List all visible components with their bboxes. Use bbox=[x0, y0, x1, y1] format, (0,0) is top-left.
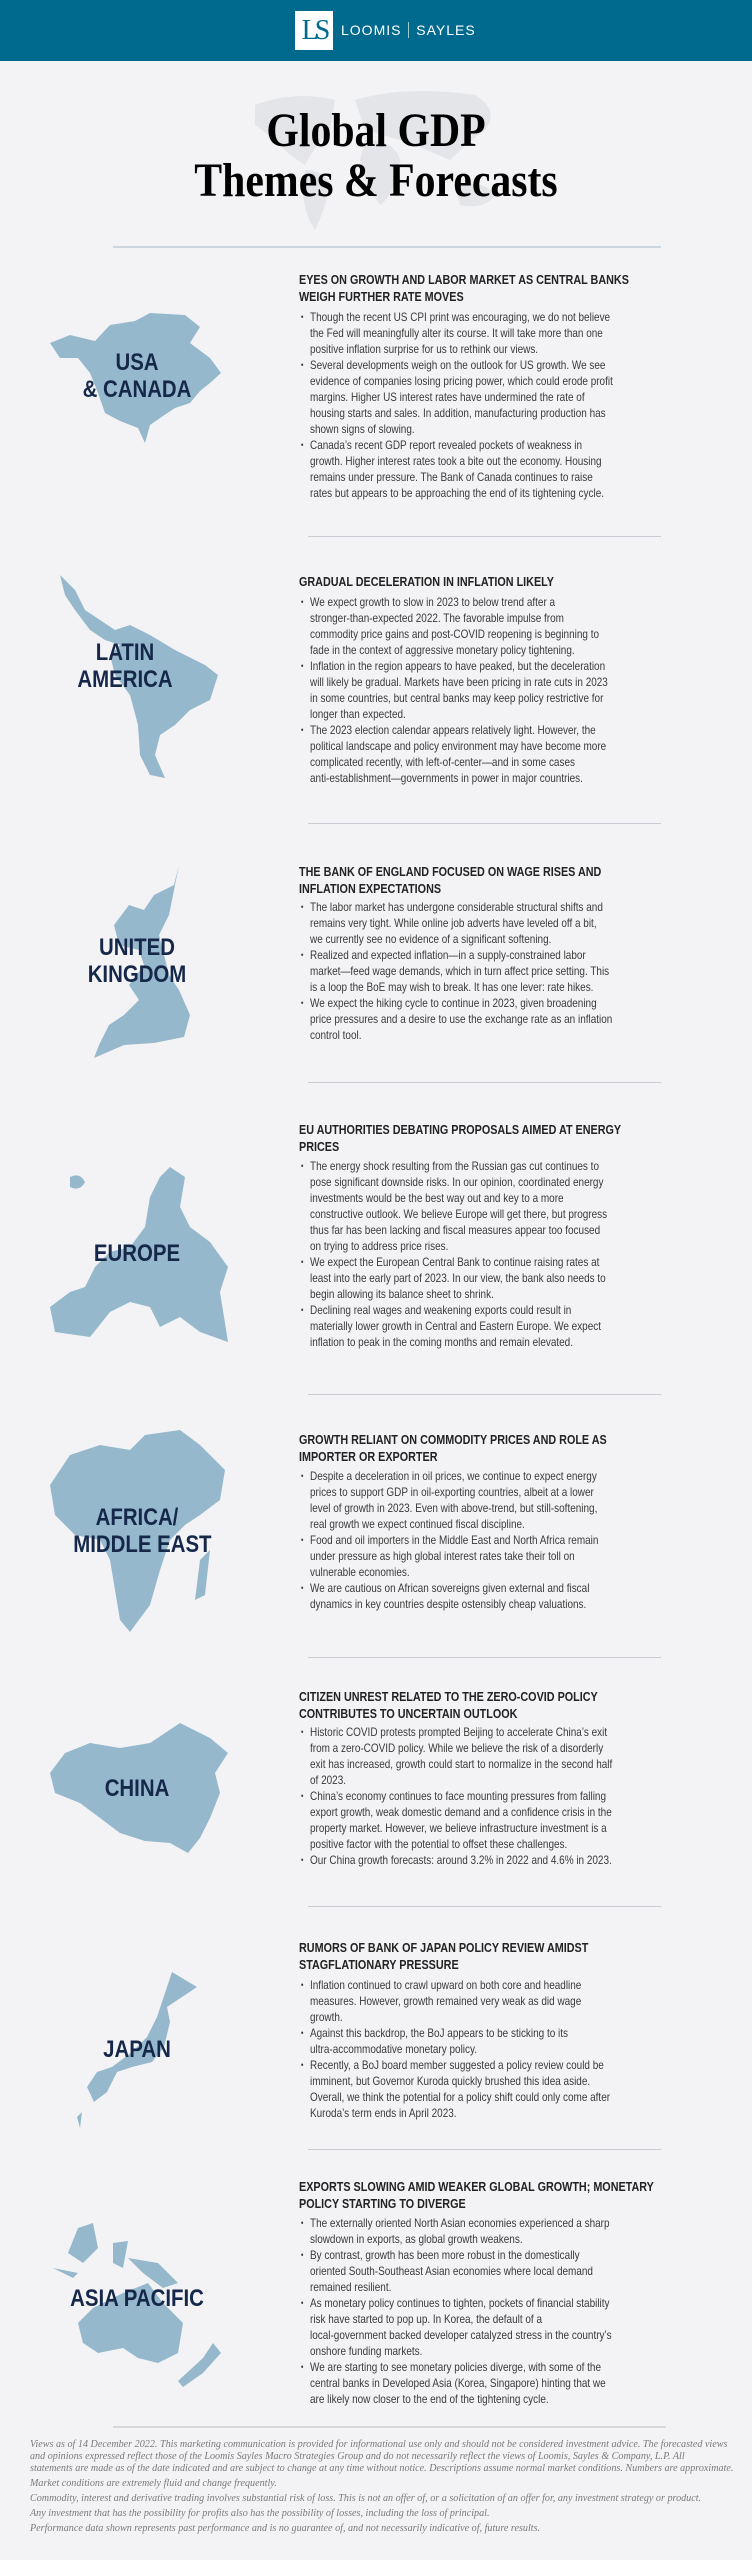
bullets: rates but appears to be approaching the end of its tightening cycle. bbox=[310, 486, 604, 500]
bullets: Overall, we think the potential for a policy shift could only come after bbox=[310, 2090, 610, 2104]
heading bbox=[299, 864, 601, 896]
heading bbox=[299, 1122, 621, 1154]
bullets: stronger-than-expected 2022. The favorable impulse from bbox=[310, 611, 564, 625]
bullets bbox=[301, 1978, 610, 2120]
bullets: growth. bbox=[310, 2010, 343, 2024]
bullets: materially lower growth in Central and Eastern Europe. We expect bbox=[310, 1319, 601, 1333]
heading: GROWTH RELIANT ON COMMODITY PRICES AND ROLE AS bbox=[299, 1432, 607, 1447]
heading: CONTRIBUTES TO UNCERTAIN OUTLOOK bbox=[299, 1706, 517, 1721]
bullets: dynamics in key countries despite ostensibly cheap valuations. bbox=[310, 1597, 586, 1611]
bullets: of 2023. bbox=[310, 1773, 346, 1787]
bullets: price pressures and a desire to use the exchange rate as an inflation bbox=[310, 1012, 612, 1026]
heading bbox=[299, 272, 629, 304]
panel: usa & canada bbox=[50, 272, 629, 500]
footer disclaimer: Views as of 14 December 2022. This marketing communication is provided for informational use only and should not be considered investment advice. The forecasted views bbox=[30, 2438, 727, 2450]
bullets: Historic COVID protests prompted Beijing to accelerate China’s exit bbox=[310, 1725, 607, 1739]
bullets: central banks in Developed Asia (Korea, Singapore) hinting that we bbox=[310, 2376, 606, 2390]
label: ASIA PACIFIC bbox=[70, 2285, 204, 2312]
heading: STAGFLATIONARY PRESSURE bbox=[299, 1957, 459, 1972]
bullets: property market. However, we believe infrastructure investment is a bbox=[310, 1821, 607, 1835]
bullets: thus far has been lacking and fiscal measures appear too focused bbox=[310, 1223, 600, 1237]
top divider bbox=[113, 246, 661, 248]
label: KINGDOM bbox=[88, 961, 186, 988]
bullets: Our China growth forecasts: around 3.2% in 2022 and 4.6% in 2023. bbox=[310, 1853, 612, 1867]
bullets bbox=[301, 1469, 598, 1611]
footer disclaimer: statements are made as of the date indicated and are subject to change at any time without notice. Descriptions assume normal market conditions. Numbers are approximate. bbox=[30, 2462, 733, 2474]
logo mark: LS bbox=[302, 15, 326, 46]
bullets: under pressure as high global interest rates take their toll on bbox=[310, 1549, 575, 1563]
heading: RUMORS OF BANK OF JAPAN POLICY REVIEW AMIDST bbox=[299, 1940, 588, 1955]
bullets: local-government backed developer catalyzed stress in the country’s bbox=[310, 2328, 612, 2342]
bullets: housing starts and sales. In addition, manufacturing production has bbox=[310, 406, 606, 420]
title world map background bbox=[255, 91, 494, 230]
bullets: margins. Higher US interest rates have undermined the rate of bbox=[310, 390, 585, 404]
heading: GRADUAL DECELERATION IN INFLATION LIKELY bbox=[299, 574, 554, 589]
label: AMERICA bbox=[77, 666, 173, 693]
bullets: Recently, a BoJ board member suggested a policy review could be bbox=[310, 2058, 604, 2072]
bullets: Against this backdrop, the BoJ appears to be sticking to its bbox=[310, 2026, 568, 2040]
map: europe bbox=[50, 1167, 228, 1342]
bullets: the Fed will meaningfully alter its course. It will take more than one bbox=[310, 326, 603, 340]
label bbox=[77, 639, 173, 693]
bullets: Realized and expected inflation—in a supply-constrained labor bbox=[310, 948, 586, 962]
bullets: We are starting to see monetary policies diverge, with some of the bbox=[310, 2360, 601, 2374]
heading: WEIGH FURTHER RATE MOVES bbox=[299, 289, 464, 304]
bullets: positive inflation surprise for us to rethink our views. bbox=[310, 342, 538, 356]
bullets: complicated recently, with left-of-center—and in some cases bbox=[310, 755, 575, 769]
bullets: inflation to peak in the coming months and remain elevated. bbox=[310, 1335, 573, 1349]
bullets: China’s economy continues to face mounting pressures from falling bbox=[310, 1789, 606, 1803]
heading: CITIZEN UNREST RELATED TO THE ZERO-COVID POLICY bbox=[299, 1689, 598, 1704]
bullets: anti-establishment—governments in power in major countries. bbox=[310, 771, 583, 785]
heading: POLICY STARTING TO DIVERGE bbox=[299, 2196, 466, 2211]
heading bbox=[299, 2179, 654, 2211]
heading bbox=[299, 1689, 598, 1721]
title bbox=[194, 104, 558, 207]
bullets: Food and oil importers in the Middle East and North Africa remain bbox=[310, 1533, 598, 1547]
heading bbox=[299, 1940, 588, 1972]
panel: japan bbox=[77, 1940, 610, 2128]
label bbox=[73, 1504, 212, 1558]
bullets: imminent, but Governor Kuroda quickly brushed this idea aside. bbox=[310, 2074, 590, 2088]
bullets: exit has increased, growth could start to normalize in the second half bbox=[310, 1757, 612, 1771]
heading: EXPORTS SLOWING AMID WEAKER GLOBAL GROWTH; MONETARY bbox=[299, 2179, 654, 2194]
map: japan bbox=[77, 1972, 197, 2128]
bullets: from a zero-COVID policy. While we believe the risk of a disorderly bbox=[310, 1741, 603, 1755]
map: china bbox=[50, 1723, 228, 1853]
label: LATIN bbox=[96, 639, 154, 666]
heading: EYES ON GROWTH AND LABOR MARKET AS CENTRAL BANKS bbox=[299, 272, 629, 287]
bullets: prices to support GDP in oil-exporting countries, albeit at a lower bbox=[310, 1485, 594, 1499]
bullets: ultra-accommodative monetary policy. bbox=[310, 2042, 477, 2056]
label bbox=[88, 934, 186, 988]
bullets bbox=[301, 2216, 612, 2406]
map: africa bbox=[50, 1430, 225, 1632]
bullets: control tool. bbox=[310, 1028, 361, 1042]
bullets: Declining real wages and weakening exports could result in bbox=[310, 1303, 571, 1317]
bullets: Canada’s recent GDP report revealed pockets of weakness in bbox=[310, 438, 582, 452]
bullets: We expect the hiking cycle to continue in 2023, given broadening bbox=[310, 996, 597, 1010]
bullets: remains very tight. While online job adverts have leveled off a bit, bbox=[310, 916, 597, 930]
label: UNITED bbox=[99, 934, 175, 961]
bullets bbox=[301, 1159, 607, 1349]
map: uk bbox=[94, 866, 190, 1058]
bullets: We are cautious on African sovereigns given external and fiscal bbox=[310, 1581, 589, 1595]
bullets: Though the recent US CPI print was encouraging, we do not believe bbox=[310, 310, 610, 324]
panel: china bbox=[50, 1689, 612, 1867]
bullets bbox=[301, 900, 612, 1042]
bullets: Inflation in the region appears to have peaked, but the deceleration bbox=[310, 659, 605, 673]
bullets: onshore funding markets. bbox=[310, 2344, 422, 2358]
bullets: real growth we expect continued fiscal discipline. bbox=[310, 1517, 525, 1531]
bullets: remains under pressure. The Bank of Canada continues to raise bbox=[310, 470, 593, 484]
bullets: remained resilient. bbox=[310, 2280, 391, 2294]
map: north america bbox=[50, 313, 221, 443]
title: Themes & Forecasts bbox=[194, 154, 558, 207]
bullets: By contrast, growth has been more robust in the domestically bbox=[310, 2248, 580, 2262]
bullets: Despite a deceleration in oil prices, we continue to expect energy bbox=[310, 1469, 597, 1483]
bullets: pose significant downside risks. In our opinion, coordinated energy bbox=[310, 1175, 603, 1189]
bullets: political landscape and policy environment may have become more bbox=[310, 739, 606, 753]
bullets: We expect growth to slow in 2023 to below trend after a bbox=[310, 595, 555, 609]
label: & CANADA bbox=[83, 376, 191, 403]
footer disclaimer: and opinions expressed reflect those of the Loomis Sayles Macro Strategies Group and do not necessarily reflect the views of Loomis, Sayles & Company, L.P. All bbox=[30, 2450, 685, 2462]
heading bbox=[299, 1432, 607, 1464]
bullets: are likely now closer to the end of the tightening cycle. bbox=[310, 2392, 549, 2406]
bullets: fade in the context of aggressive monetary policy tightening. bbox=[310, 643, 575, 657]
title: Global GDP bbox=[266, 104, 486, 157]
bullets: growth. Higher interest rates took a bite out the economy. Housing bbox=[310, 454, 602, 468]
bullets: oriented South-Southeast Asian economies where local demand bbox=[310, 2264, 593, 2278]
bullets: begin allowing its balance sheet to shrink. bbox=[310, 1287, 494, 1301]
bullets: commodity price gains and post-COVID reopening is beginning to bbox=[310, 627, 599, 641]
footer disclaimer: Any investment that has the possibility for profits also has the possibility of losses, including the loss of principal. bbox=[30, 2507, 490, 2519]
map: latin america bbox=[60, 575, 218, 778]
logo text: LOOMIS SAYLES bbox=[341, 22, 476, 38]
bullets: export growth, weak domestic demand and a confidence crisis in the bbox=[310, 1805, 612, 1819]
panel: united kingdom bbox=[88, 864, 612, 1058]
panel: africa / middle east bbox=[50, 1430, 607, 1632]
heading: PRICES bbox=[299, 1139, 339, 1154]
bullets bbox=[301, 1725, 612, 1867]
bullets: market—feed wage demands, which in turn affect price setting. This bbox=[310, 964, 609, 978]
panel: asia pacific bbox=[53, 2179, 654, 2406]
bullets: The energy shock resulting from the Russian gas cut continues to bbox=[310, 1159, 599, 1173]
footer disclaimer: Market conditions are extremely fluid and change frequently. bbox=[30, 2477, 277, 2489]
bullets: Kuroda’s term ends in April 2023. bbox=[310, 2106, 457, 2120]
bullets: positive factor with the potential to offset these challenges. bbox=[310, 1837, 567, 1851]
bullets: in some countries, but central banks may keep policy restrictive for bbox=[310, 691, 603, 705]
map: asia pacific bbox=[53, 2223, 221, 2387]
bullets: level of growth in 2023. Even with above-trend, but still-softening, bbox=[310, 1501, 597, 1515]
heading: THE BANK OF ENGLAND FOCUSED ON WAGE RISES AND bbox=[299, 864, 601, 879]
header bar bbox=[0, 0, 752, 61]
heading: IMPORTER OR EXPORTER bbox=[299, 1449, 437, 1464]
bullets: We expect the European Central Bank to continue raising rates at bbox=[310, 1255, 599, 1269]
footer disclaimer bbox=[30, 2438, 733, 2534]
bullets: The labor market has undergone considerable structural shifts and bbox=[310, 900, 603, 914]
logo mark bbox=[295, 11, 333, 50]
bullets: is a loop the BoE may wish to break. It has one lever: rate hikes. bbox=[310, 980, 593, 994]
bullets: vulnerable economies. bbox=[310, 1565, 410, 1579]
bullets: evidence of companies losing pricing power, which could erode profit bbox=[310, 374, 613, 388]
bullets: shown signs of slowing. bbox=[310, 422, 415, 436]
bullets: we currently see no evidence of a significant softening. bbox=[310, 932, 551, 946]
bullets: slowdown in exports, as global growth weakens. bbox=[310, 2232, 523, 2246]
bullets: will likely be gradual. Markets have been pricing in rate cuts in 2023 bbox=[310, 675, 608, 689]
bullets: on trying to address price rises. bbox=[310, 1239, 448, 1253]
label: JAPAN bbox=[103, 2036, 171, 2063]
bullets: As monetary policy continues to tighten, pockets of financial stability bbox=[310, 2296, 610, 2310]
heading: INFLATION EXPECTATIONS bbox=[299, 881, 441, 896]
panel: europe bbox=[50, 1122, 621, 1349]
bullets: Inflation continued to crawl upward on both core and headline bbox=[310, 1978, 581, 1992]
footer disclaimer: Commodity, interest and derivative trading involves substantial risk of loss. This is not an offer of, or a solicitation of an offer for, any investment strategy or product. bbox=[30, 2492, 701, 2504]
label: MIDDLE EAST bbox=[73, 1531, 212, 1558]
label: USA bbox=[115, 349, 159, 376]
footer divider bbox=[113, 2426, 666, 2428]
bullets: least into the early part of 2023. In our view, the bank also needs to bbox=[310, 1271, 606, 1285]
bullets: constructive outlook. We believe Europe will get there, but progress bbox=[310, 1207, 607, 1221]
label: EUROPE bbox=[94, 1240, 180, 1267]
bullets bbox=[301, 310, 613, 500]
bullets: The externally oriented North Asian economies experienced a sharp bbox=[310, 2216, 610, 2230]
panel: latin america bbox=[60, 574, 608, 785]
bullets: longer than expected. bbox=[310, 707, 406, 721]
bullets bbox=[301, 595, 608, 785]
footer disclaimer: Performance data shown represents past performance and is no guarantee of, and not necessarily indicative of, future results. bbox=[30, 2522, 540, 2534]
bullets: risk have started to pop up. In Korea, the default of a bbox=[310, 2312, 542, 2326]
bullets: The 2023 election calendar appears relatively light. However, the bbox=[310, 723, 596, 737]
bullets: measures. However, growth remained very weak as did wage bbox=[310, 1994, 581, 2008]
label bbox=[83, 349, 191, 403]
bullets: Several developments weigh on the outlook for US growth. We see bbox=[310, 358, 605, 372]
bullets: investments would be the best way out and key to a more bbox=[310, 1191, 564, 1205]
label: AFRICA/ bbox=[96, 1504, 178, 1531]
heading: EU AUTHORITIES DEBATING PROPOSALS AIMED AT ENERGY bbox=[299, 1122, 621, 1137]
label: CHINA bbox=[105, 1775, 169, 1802]
